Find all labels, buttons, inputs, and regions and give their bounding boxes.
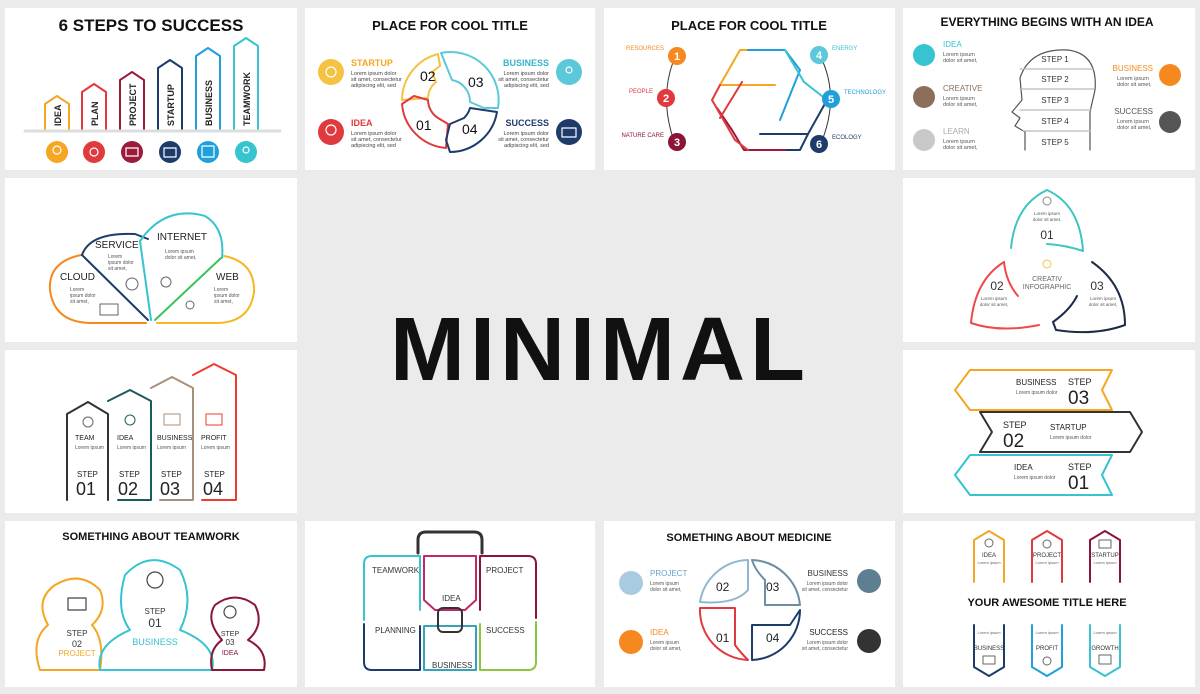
text: bag labels: BUSINESS: [432, 661, 472, 670]
text blocks and icons: Lorem ipsum dolor: [503, 131, 549, 137]
chart: head with steps: STEP 4: [1041, 117, 1069, 126]
text: step labels: TEAM: [75, 435, 95, 442]
text: step labels: 01: [76, 479, 96, 499]
labels with icons: dolor sit amet,: [943, 102, 978, 108]
text blocks and icons: STARTUP: [351, 58, 393, 68]
text: step labels: STEP: [161, 470, 182, 479]
panel: teamwork: [5, 521, 297, 687]
labels with icons: LEARN: [943, 127, 970, 136]
heading: PLACE FOR COOL TITLE: [372, 18, 528, 33]
labels and icons: [619, 569, 881, 654]
text: banner labels: STEP: [1068, 462, 1092, 472]
numbered circles and labels: TECHNOLOGY: [844, 90, 886, 96]
text: cloud labels: Lorem: [108, 254, 122, 260]
numbered circles and labels: 1: [674, 51, 680, 63]
panel: triangle creative infographic: [903, 178, 1195, 342]
text: banner labels: 02: [1003, 431, 1024, 452]
text blocks and icons: [318, 58, 582, 149]
chart: top tags: PROJECT: [1033, 553, 1061, 559]
chart: house pillars: [67, 364, 236, 500]
panel: 6 steps to success: [5, 8, 297, 170]
numbered circles and labels: 4: [816, 50, 823, 62]
icons: [68, 572, 236, 618]
text: banner labels: BUSINESS: [1016, 378, 1056, 387]
labels with icons: dolor sit amet,: [1117, 82, 1152, 88]
numbered circles and labels: 3: [674, 137, 680, 149]
labels and icons: IDEA: [650, 628, 669, 637]
text: step labels: IDEA: [117, 435, 134, 442]
labels with icons: Lorem ipsum: [943, 96, 975, 102]
panel: four step houses: [5, 350, 297, 513]
text: team labels: IDEA: [222, 650, 238, 657]
chart: curved triangle: INFOGRAPHIC: [1023, 284, 1071, 291]
chart: 4-part ring: 01: [416, 117, 432, 133]
chart: cross circle: 03: [766, 580, 780, 594]
numbered circles and labels: RESOURCES: [626, 46, 664, 52]
heading: SOMETHING ABOUT TEAMWORK: [62, 531, 240, 543]
text: banner labels: Lorem ipsum dolor: [1014, 475, 1056, 481]
text: step labels: BUSINESS: [157, 435, 193, 442]
text blocks and icons: sit amet, consectetur: [498, 137, 549, 143]
labels with icons: SUCCESS: [1114, 107, 1153, 116]
labels with icons: Lorem ipsum: [943, 52, 975, 58]
text blocks and icons: SUCCESS: [505, 118, 549, 128]
chart: step pillars: [25, 38, 280, 131]
chart: head with steps: STEP 2: [1041, 75, 1069, 84]
text: team labels: STEP: [145, 607, 165, 616]
labels with icons: dolor sit amet,: [943, 145, 978, 151]
text blocks and icons: sit amet, consectetur: [351, 77, 402, 83]
labels with icons: [913, 40, 1181, 151]
chart: head with steps: STEP 1: [1041, 55, 1069, 64]
text: cloud labels: Lorem: [214, 287, 228, 293]
panel: hexagon place for cool title: [604, 8, 895, 170]
text: cloud labels: CLOUD: [60, 272, 95, 283]
chart: cross circle: 01: [716, 631, 730, 645]
labels with icons: IDEA: [943, 40, 962, 49]
chart: curved triangle: 01: [1040, 228, 1054, 242]
text: cloud labels: ipsum dolor: [214, 293, 240, 299]
text: team labels: BUSINESS: [132, 637, 178, 647]
chart: cross circle: [700, 560, 800, 660]
text: step labels: Lorem ipsum: [201, 445, 230, 451]
text: banner labels: STEP: [1068, 377, 1092, 387]
center: MINIMAL title: MINIMAL: [390, 300, 810, 400]
text: step labels: 04: [203, 479, 223, 499]
labels with icons: BUSINESS: [1113, 64, 1153, 73]
text: team labels: [58, 607, 239, 658]
chart: cross circle: 02: [716, 580, 730, 594]
text: bag labels: IDEA: [442, 594, 461, 603]
text: banner labels: 01: [1068, 473, 1089, 494]
chart: bottom tags: GROWTH: [1091, 646, 1119, 652]
heading: awesome title: YOUR AWESOME TITLE HERE: [967, 597, 1127, 609]
chart: head with steps: [1012, 50, 1095, 150]
labels with icons: Lorem ipsum: [1117, 119, 1149, 125]
panel: bag grid: [305, 521, 595, 687]
chart: step pillars: PLAN: [90, 102, 100, 126]
heading: PLACE FOR COOL TITLE: [671, 18, 827, 33]
text: banner labels: Lorem ipsum dolor: [1050, 435, 1092, 441]
text: cloud labels: sit amet,: [70, 299, 89, 305]
chart: bottom tags: Lorem ipsum: [1093, 630, 1117, 635]
labels and icons: sit amet, consectetur: [802, 587, 848, 593]
chart: curved triangle: dolor sit amet,: [1033, 217, 1061, 222]
text: team labels: 03: [226, 638, 235, 647]
text: team labels: STEP: [221, 631, 239, 638]
numbered circles and labels: 5: [828, 94, 834, 106]
chart: top tags: [974, 531, 1120, 582]
chart: curved triangle: Lorem ipsum: [1034, 211, 1060, 216]
text: step labels: STEP: [77, 470, 98, 479]
text: bag labels: PLANNING: [375, 626, 416, 635]
numbered circles and labels: 6: [816, 139, 822, 151]
text: cloud labels: sit amet,: [214, 299, 233, 305]
labels with icons: Lorem ipsum: [943, 139, 975, 145]
numbered circles and labels: ECOLOGY: [832, 135, 862, 141]
icons: [83, 414, 222, 427]
chart: curved triangle: dolor sit amet,: [980, 302, 1008, 307]
labels and icons: sit amet, consectetur: [802, 646, 848, 652]
text: cloud labels: sit amet,: [108, 266, 127, 272]
chart: 4-part ring: 04: [462, 121, 478, 137]
chart: bottom tags: Lorem ipsum: [1035, 630, 1059, 635]
chart: 4-part ring: [402, 52, 499, 152]
labels and icons: SUCCESS: [809, 628, 848, 637]
labels and icons: dolor sit amet,: [650, 646, 681, 652]
panel: cloud: [5, 178, 297, 342]
text blocks and icons: Lorem ipsum dolor: [351, 71, 397, 77]
chart: bottom tags: BUSINESS: [974, 646, 1004, 652]
labels with icons: CREATIVE: [943, 84, 982, 93]
text: cloud labels: Lorem: [70, 287, 84, 293]
chart: top tags: Lorem ipsum: [977, 560, 1001, 565]
icons: step circles: [46, 141, 257, 163]
text blocks and icons: adipiscing elit, sed: [504, 83, 549, 89]
heading: SOMETHING ABOUT MEDICINE: [666, 532, 832, 544]
panel: cycle place for cool title: [305, 8, 595, 170]
text: cloud labels: Lorem ipsum: [165, 249, 194, 255]
numbered circles and labels: ENERGY: [832, 46, 857, 52]
text: banner labels: [1003, 377, 1092, 494]
labels and icons: BUSINESS: [808, 569, 848, 578]
panel: medicine: [604, 521, 895, 687]
numbered circles and labels: NATURE CARE: [621, 133, 664, 139]
text: team labels: STEP: [67, 629, 87, 638]
chart: step pillars: STARTUP: [166, 84, 176, 126]
text: team labels: PROJECT: [58, 649, 96, 658]
chart: heads: [36, 560, 265, 670]
chart: top tags: Lorem ipsum: [1035, 560, 1059, 565]
chart: top tags: STARTUP: [1091, 553, 1119, 559]
heading: 6 steps: 6 STEPS TO SUCCESS: [59, 16, 243, 35]
text: banner labels: IDEA: [1014, 463, 1033, 472]
text: step labels: STEP: [119, 470, 140, 479]
text: cloud labels: WEB: [216, 272, 239, 283]
text: bag labels: PROJECT: [486, 566, 523, 575]
text blocks and icons: sit amet, consectetur: [498, 77, 549, 83]
chart: cross circle: 04: [766, 631, 780, 645]
labels and icons: Lorem ipsum: [650, 640, 679, 646]
text: step labels: [75, 435, 230, 499]
chart: bag with 6 sections: [364, 532, 536, 670]
labels with icons: Lorem ipsum: [1117, 76, 1149, 82]
text: cloud labels: [60, 232, 240, 305]
text blocks and icons: IDEA: [351, 118, 373, 128]
chart: step pillars: PROJECT: [128, 83, 138, 126]
panel: awesome title tags: [903, 521, 1195, 687]
text: step labels: Lorem ipsum: [157, 445, 186, 451]
text: banner labels: STEP: [1003, 420, 1027, 430]
chart: head with steps: STEP 5: [1041, 138, 1069, 147]
chart: step pillars: BUSINESS: [204, 80, 214, 126]
chart: cloud segments: [50, 213, 254, 323]
chart: hexagon: [712, 50, 827, 150]
labels and icons: Lorem ipsum dolor: [807, 640, 848, 646]
panel: everything begins with an idea: [903, 8, 1195, 170]
labels with icons: dolor sit amet,: [1117, 125, 1152, 131]
chart: curved triangle: Lorem ipsum: [981, 296, 1007, 301]
chart: bottom tags: PROFIT: [1036, 646, 1058, 652]
text blocks and icons: adipiscing elit, sed: [504, 143, 549, 149]
text blocks and icons: adipiscing elit, sed: [351, 83, 396, 89]
labels and icons: PROJECT: [650, 569, 687, 578]
text: team labels: 01: [148, 616, 162, 630]
chart: curved triangle: [971, 190, 1125, 332]
numbered circles and labels: [621, 46, 886, 153]
text: cloud labels: ipsum dolor: [108, 260, 134, 266]
panel: arrow steps: [903, 350, 1195, 513]
text blocks and icons: sit amet, consectetur: [351, 137, 402, 143]
text: bag labels: SUCCESS: [486, 626, 525, 635]
text: step labels: PROFIT: [201, 435, 227, 442]
text: step labels: 02: [118, 479, 138, 499]
text: bag labels: TEAMWORK: [372, 566, 420, 575]
text: banner labels: STARTUP: [1050, 423, 1087, 432]
text: cloud labels: dolor sit amet,: [165, 255, 196, 261]
chart: bottom tags: Lorem ipsum: [977, 630, 1001, 635]
chart: curved triangle: Lorem ipsum: [1090, 296, 1116, 301]
text: banner labels: 03: [1068, 388, 1089, 409]
text: step labels: Lorem ipsum: [117, 445, 146, 451]
text: step labels: 03: [160, 479, 180, 499]
text blocks and icons: Lorem ipsum dolor: [503, 71, 549, 77]
chart: 4-part ring: 03: [468, 74, 484, 90]
text: team labels: 02: [72, 639, 82, 649]
chart: bottom tags: [974, 625, 1120, 676]
text: banner labels: Lorem ipsum dolor: [1016, 390, 1058, 396]
labels and icons: Lorem ipsum: [650, 581, 679, 587]
chart: step pillars: IDEA: [53, 104, 63, 126]
numbered circles and labels: 2: [663, 93, 669, 105]
chart: top tags: IDEA: [982, 553, 996, 559]
text: cloud labels: INTERNET: [157, 232, 207, 243]
chart: head with steps: STEP 3: [1041, 96, 1069, 105]
labels and icons: Lorem ipsum dolor: [807, 581, 848, 587]
chart: curved triangle: 02: [990, 279, 1004, 293]
chart: curved triangle: 03: [1090, 279, 1104, 293]
text blocks and icons: BUSINESS: [503, 58, 549, 68]
text blocks and icons: Lorem ipsum dolor: [351, 131, 397, 137]
heading: EVERYTHING BEGINS WITH AN IDEA: [940, 15, 1154, 29]
numbered circles and labels: PEOPLE: [629, 89, 653, 95]
text blocks and icons: adipiscing elit, sed: [351, 143, 396, 149]
text: step labels: Lorem ipsum: [75, 445, 104, 451]
icons: cloud: [100, 277, 194, 315]
text: step labels: STEP: [204, 470, 225, 479]
labels with icons: dolor sit amet,: [943, 58, 978, 64]
text: bag labels: [372, 566, 525, 670]
chart: step pillars: TEAMWORK: [242, 72, 252, 126]
chart: curved triangle: CREATIV: [1032, 276, 1062, 283]
labels and icons: dolor sit amet,: [650, 587, 681, 593]
chart: top tags: Lorem ipsum: [1093, 560, 1117, 565]
chart: curved triangle: dolor sit amet,: [1089, 302, 1117, 307]
chart: banners: [955, 370, 1142, 495]
chart: 4-part ring: 02: [420, 68, 436, 84]
text: cloud labels: SERVICE: [95, 240, 139, 251]
text: cloud labels: ipsum dolor: [70, 293, 96, 299]
